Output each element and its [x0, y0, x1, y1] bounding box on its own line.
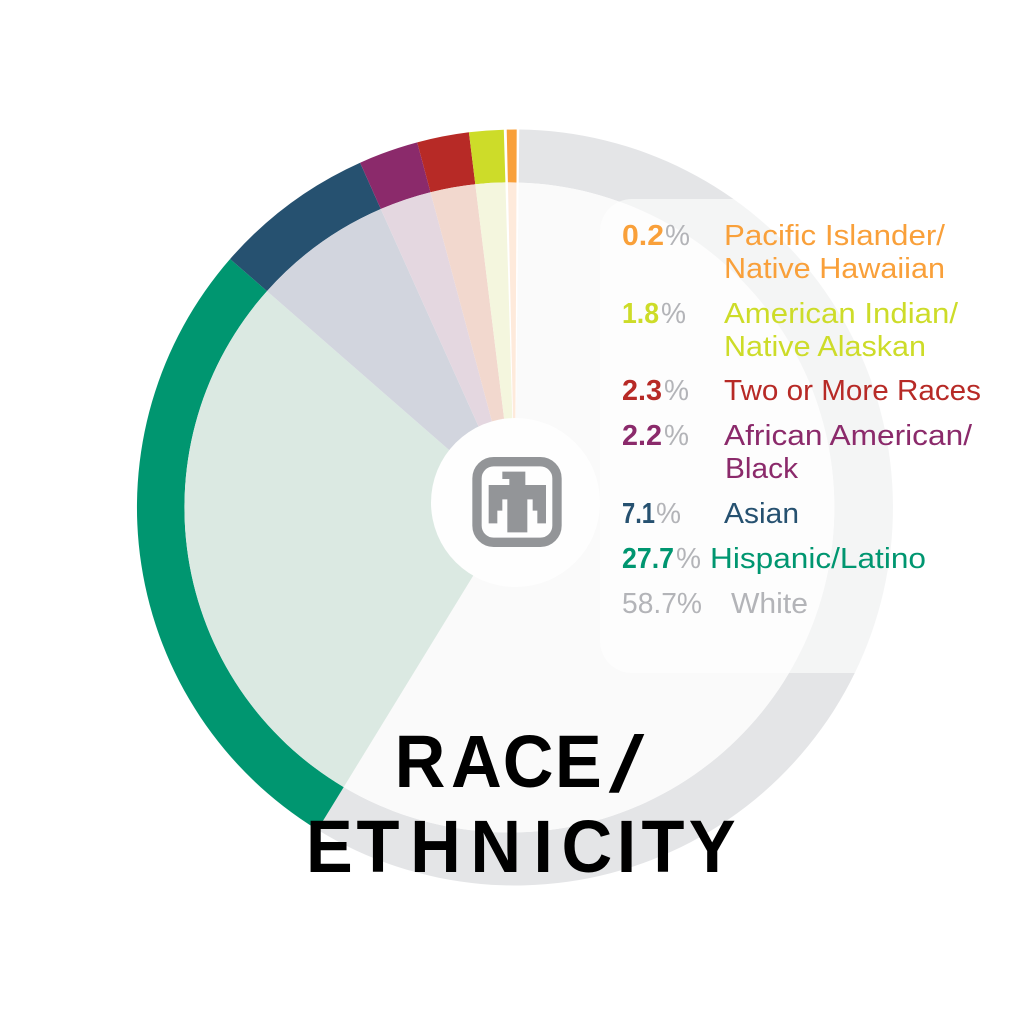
legend row: Hispanic/Latino: 27.7: [622, 543, 674, 575]
title: [306, 719, 736, 888]
ring segment: Asian 7.1%: [230, 163, 381, 291]
legend row: Pacific Islander/Native Hawaiian: Pacific Islander/: [724, 220, 946, 252]
legend row: African American/Black: [622, 420, 973, 485]
ring segment: Pacific Islander/Native Hawaiian 0.2%: [507, 129, 517, 182]
wedge: Two or More Races: [430, 184, 515, 507]
wedge: White: [344, 183, 834, 832]
legend row: American Indian/Native Alaskan: [622, 298, 959, 363]
ring segment: African American/Black 2.2%: [360, 142, 430, 209]
icon: thunderbird logo: [477, 462, 557, 542]
ring segment: Hispanic/Latino 27.7%: [137, 259, 344, 830]
legend row: Asian: [622, 498, 799, 530]
legend row: Asian: 7.1: [622, 498, 655, 530]
wedge: Asian: [267, 209, 515, 508]
legend row: Pacific Islander/Native Hawaiian: Native Hawaiian: [724, 253, 945, 285]
legend row: American Indian/Native Alaskan: %: [661, 298, 686, 330]
legend backing panel: [600, 199, 1020, 673]
legend row: African American/Black: %: [664, 420, 689, 452]
ring segment: Two or More Races 2.3%: [417, 132, 475, 192]
title: /: [609, 719, 645, 809]
legend row: Two or More Races: 2.3: [622, 375, 662, 407]
legend row: Hispanic/Latino: %: [676, 543, 701, 575]
wedge: Hispanic/Latino: [184, 291, 515, 787]
legend row: White: White: [731, 588, 808, 620]
legend row: American Indian/Native Alaskan: American Indian/: [724, 298, 959, 330]
legend row: Asian: %: [656, 498, 681, 530]
legend row: American Indian/Native Alaskan: Native Alaskan: [724, 331, 926, 363]
legend row: Asian: Asian: [724, 498, 799, 530]
title: ETHNICITY: [306, 806, 736, 888]
legend row: Two or More Races: Two or More Races: [724, 375, 981, 407]
legend row: American Indian/Native Alaskan: 1.8: [622, 298, 659, 330]
legend: [622, 220, 981, 620]
wedge: Pacific Islander/Native Hawaiian: [508, 182, 516, 507]
legend row: Pacific Islander/Native Hawaiian: 0.2: [622, 220, 664, 252]
legend row: Hispanic/Latino: [622, 543, 926, 575]
legend row: Pacific Islander/Native Hawaiian: [622, 220, 946, 285]
wedge: American Indian/Native Alaskan: [475, 182, 515, 508]
donut chart: inner tinted wedges: [184, 182, 834, 832]
ring segment: American Indian/Native Alaskan 1.8%: [469, 130, 505, 184]
donut chart: outer ring segments: [137, 129, 893, 885]
ring segment: White 58.7%: [318, 130, 893, 885]
title: RACE: [395, 721, 602, 803]
center hub circle: [431, 418, 600, 587]
legend row: African American/Black: African American/: [724, 420, 973, 452]
legend row: Pacific Islander/Native Hawaiian: %: [665, 220, 690, 252]
legend row: Hispanic/Latino: Hispanic/Latino: [710, 543, 926, 575]
legend row: Two or More Races: %: [664, 375, 689, 407]
legend row: African American/Black: 2.2: [622, 420, 662, 452]
legend row: White: 58.7%: [622, 588, 702, 620]
legend row: African American/Black: Black: [725, 453, 799, 485]
wedge: African American/Black: [381, 192, 515, 507]
legend row: White: [622, 588, 808, 620]
